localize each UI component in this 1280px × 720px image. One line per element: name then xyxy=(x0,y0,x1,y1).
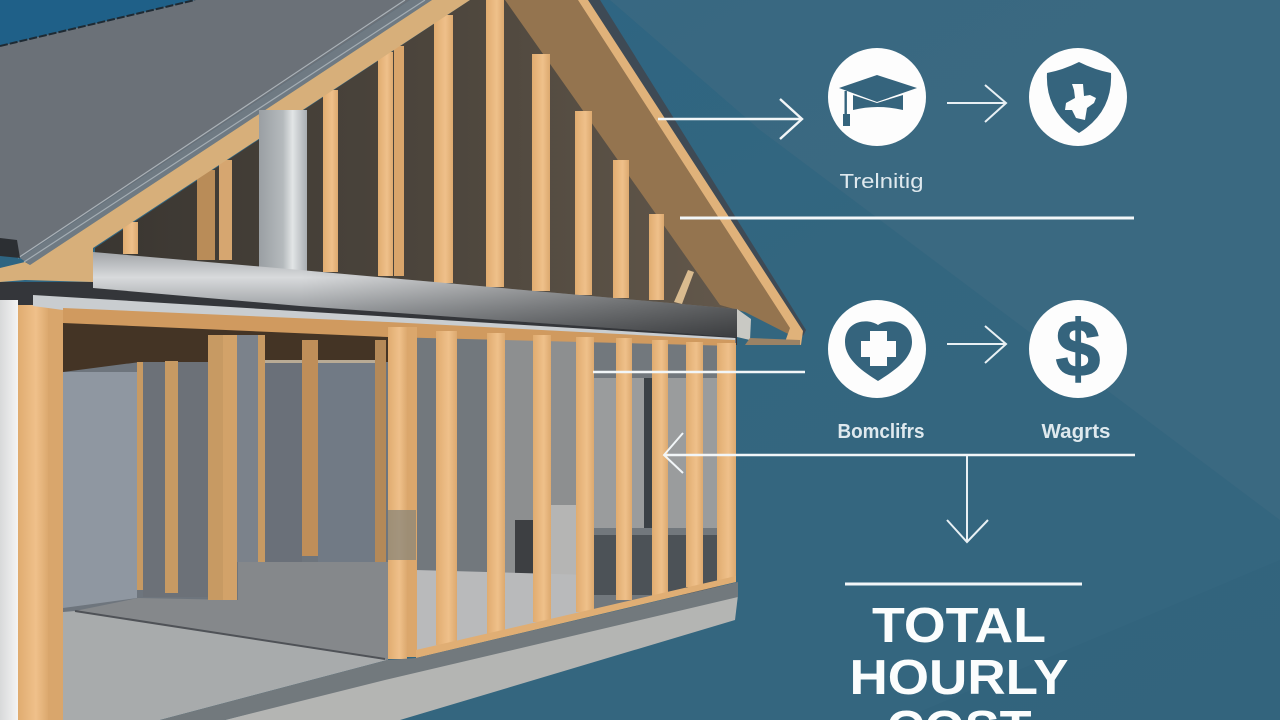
rake dark edge xyxy=(588,0,806,336)
roof edge trim xyxy=(20,0,432,265)
icon: dollar sign xyxy=(1029,300,1127,398)
white left wall xyxy=(0,300,18,720)
window backdrop right xyxy=(416,330,736,655)
soffit underside xyxy=(505,0,800,340)
house cutaway illustration xyxy=(0,0,806,720)
gray drywall panel xyxy=(63,372,137,608)
left corner posts xyxy=(18,305,48,720)
foundation cap xyxy=(160,582,738,720)
roof sky corner xyxy=(0,0,195,46)
label: training: Trelnitig xyxy=(840,171,924,193)
fascia board xyxy=(0,0,470,282)
stud stain xyxy=(388,510,416,560)
label: benefits: Bomclifrs xyxy=(838,421,924,443)
icon: shield xyxy=(1029,48,1127,146)
heading: total hourly cost: HOURLY xyxy=(850,651,1068,705)
interior posts xyxy=(137,335,386,600)
back floor xyxy=(75,562,388,660)
connector: wall to benefits xyxy=(593,371,805,373)
arrow: training to safety xyxy=(947,85,1006,122)
upper studs xyxy=(123,0,694,304)
top plate trim white xyxy=(33,295,735,343)
dark band under fascia xyxy=(0,282,737,345)
icon: dollar sign: $ xyxy=(1056,304,1100,393)
front studs xyxy=(388,327,736,659)
sill plate xyxy=(416,576,736,658)
icon: graduation cap xyxy=(828,48,926,146)
arrow: down to total xyxy=(947,456,988,542)
lower interior back wall xyxy=(63,315,388,720)
interior header dark xyxy=(63,320,388,372)
connector: rake to training arrow xyxy=(658,99,802,139)
top beam wood xyxy=(63,308,735,346)
gable dark interior xyxy=(95,0,735,310)
roof plane xyxy=(0,0,410,258)
divider above total xyxy=(845,582,1082,586)
foundation concrete xyxy=(225,595,738,720)
icon: heart with cross xyxy=(828,300,926,398)
roof ridge dashes xyxy=(0,0,195,46)
front floor xyxy=(63,611,387,720)
arrow: benefits to wages xyxy=(947,326,1006,363)
rake wood board xyxy=(578,0,803,345)
connector: wages back to house xyxy=(664,433,1135,473)
heading: total hourly cost xyxy=(850,599,1068,720)
vertical duct xyxy=(259,110,307,285)
label: wages: Wagrts xyxy=(1042,421,1110,443)
divider top xyxy=(680,216,1134,220)
horizontal duct xyxy=(93,252,737,337)
heading: total hourly cost: TOTAL xyxy=(872,599,1046,653)
